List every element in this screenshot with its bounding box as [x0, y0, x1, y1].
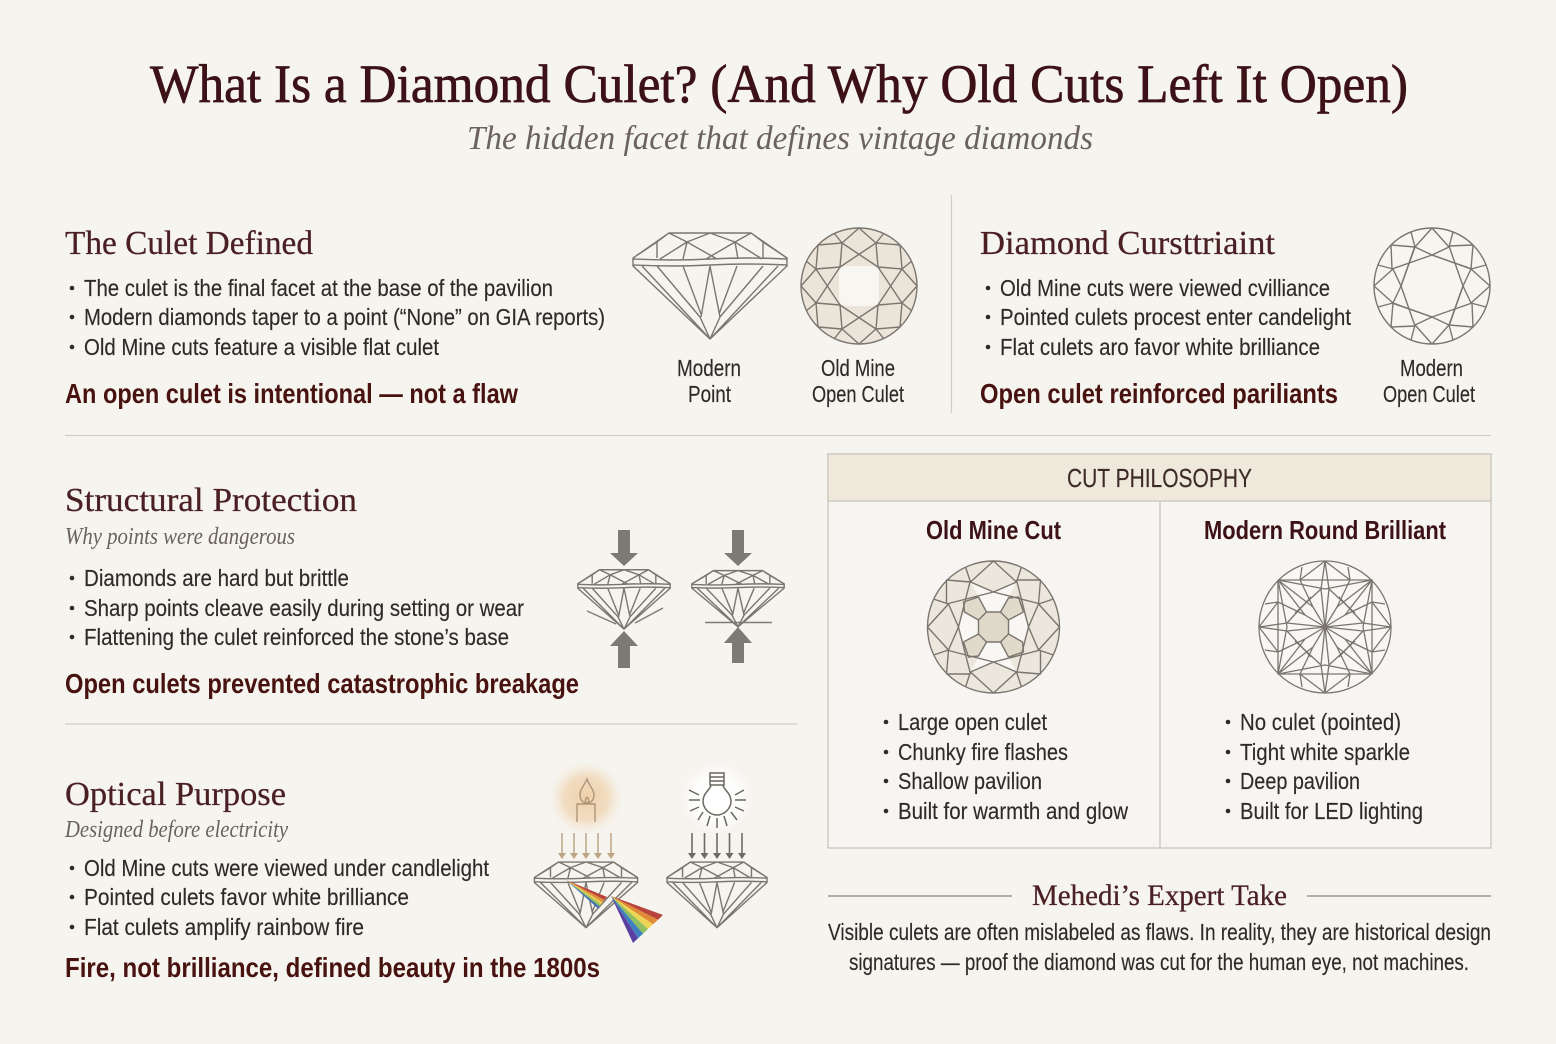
bullet list: Pointed culets procest enter candelight	[1000, 304, 1352, 330]
key takeaway: Fire, not brilliance, defined beauty in the 1800s	[65, 952, 600, 983]
panel: cut philosophy	[828, 454, 1491, 848]
bullet list: Built for LED lighting	[1240, 798, 1423, 824]
panel: diamond constraint	[980, 225, 1490, 409]
bullet list	[70, 855, 490, 940]
bullet list: Chunky fire flashes	[898, 739, 1068, 765]
key takeaway: Open culet reinforced pariliants	[980, 378, 1338, 409]
column: modern round brilliant	[1204, 515, 1446, 824]
bullet list	[1226, 709, 1423, 824]
column heading: Modern Round Brilliant	[1204, 515, 1446, 545]
panel frame	[828, 454, 1491, 848]
icon: light bulb with rays	[681, 762, 753, 834]
subtitle: The hidden facet that defines vintage diamonds	[467, 120, 1093, 157]
icon: candle light arrows	[558, 833, 615, 859]
panel header bar	[828, 454, 1491, 501]
column heading: Old Mine Cut	[926, 515, 1061, 545]
icon: modern open culet top view	[1374, 228, 1490, 344]
expert take heading: Mehedi’s Expert Take	[1032, 879, 1287, 912]
bullet list	[986, 275, 1352, 360]
panel: the culet defined	[65, 225, 917, 409]
bullet list: The culet is the final facet at the base of the pavilion	[84, 275, 553, 301]
column: old mine cut	[884, 515, 1128, 824]
label: point: Point	[688, 381, 731, 407]
bullet list: Built for warmth and glow	[898, 798, 1128, 824]
icon: candle with warm glow	[549, 761, 623, 835]
panel: structural protection	[65, 482, 784, 699]
label: modern: Modern	[1400, 355, 1463, 381]
icon: old mine cut top view	[928, 561, 1060, 693]
bullet list: Flat culets aro favor white brilliance	[1000, 334, 1320, 360]
bullet list: Large open culet	[898, 709, 1048, 735]
icon: flat culet under pressure	[692, 530, 784, 663]
bullet list: Deep pavilion	[1240, 768, 1360, 794]
subheading: Why points were dangerous	[65, 524, 295, 550]
bullet list: Sharp points cleave easily during setting or wear	[84, 595, 524, 621]
bullet list: Pointed culets favor white brilliance	[84, 884, 409, 910]
bullet list: Tight white sparkle	[1240, 739, 1410, 765]
bullet list	[884, 709, 1128, 824]
bullet list	[70, 275, 605, 360]
title: What Is a Diamond Culet? (And Why Old Cuts Left It Open)	[150, 54, 1408, 114]
heading: diamond constraint: Diamond Cursttriaint	[980, 225, 1276, 262]
bullet list: Old Mine cuts were viewed cvilliance	[1000, 275, 1330, 301]
bullet list	[70, 565, 524, 650]
icon: modern round brilliant top view	[1259, 561, 1391, 693]
bullet list: Flat culets amplify rainbow fire	[84, 914, 364, 940]
key takeaway: Open culets prevented catastrophic breakage	[65, 668, 579, 699]
header text: CUT PHILOSOPHY	[1067, 463, 1252, 493]
key takeaway: An open culet is intentional — not a flaw	[65, 378, 518, 409]
label: open culet: Open Culet	[812, 381, 904, 407]
bullet list: Diamonds are hard but brittle	[84, 565, 349, 591]
bullet list: Old Mine cuts feature a visible flat culet	[84, 334, 440, 360]
icon: diamond under electric light	[667, 862, 767, 928]
label: open culet: Open Culet	[1383, 381, 1475, 407]
bullet list: No culet (pointed)	[1240, 709, 1401, 735]
label: modern point: Modern	[677, 355, 741, 381]
panel: expert take	[828, 879, 1491, 975]
heading: optical purpose: Optical Purpose	[65, 776, 286, 813]
bullet list: Modern diamonds taper to a point (“None” on GIA reports)	[84, 304, 605, 330]
subheading: Designed before electricity	[64, 817, 288, 843]
bullet list: Shallow pavilion	[898, 768, 1042, 794]
bullet list: Flattening the culet reinforced the stone’s base	[84, 624, 509, 650]
icon: electric light arrows	[688, 833, 746, 859]
panel: optical purpose	[64, 761, 767, 983]
icon: modern point diamond side view	[633, 233, 787, 339]
icon: pointed culet under pressure	[578, 530, 670, 668]
label: old mine: Old Mine	[821, 355, 895, 381]
icon: old mine open culet top view	[801, 228, 917, 344]
heading: structural protection: Structural Protection	[65, 482, 357, 519]
heading: the culet defined: The Culet Defined	[65, 225, 313, 262]
icon: diamond with rainbow fire	[534, 862, 663, 943]
bullet list: Old Mine cuts were viewed under candlelight	[84, 855, 490, 881]
expert take paragraph	[828, 919, 1491, 975]
